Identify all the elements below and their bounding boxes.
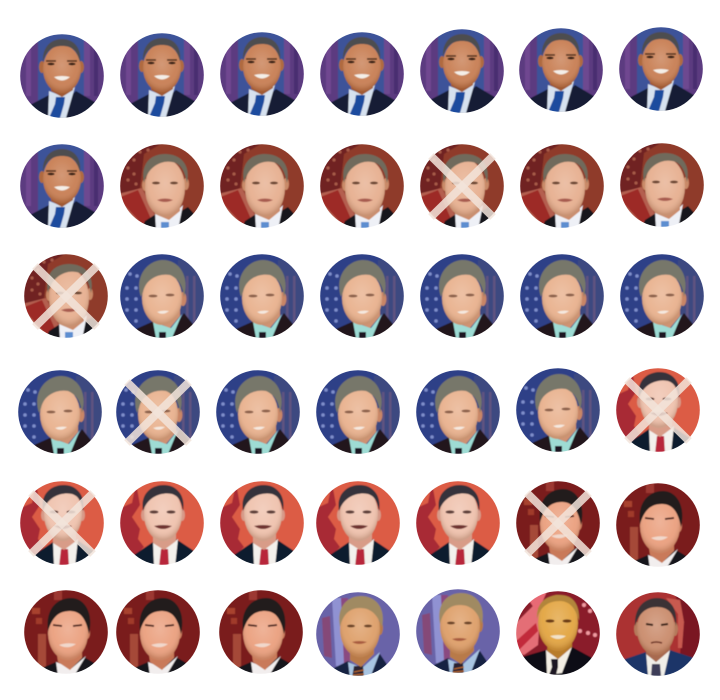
portrait: Clinton 6 [618, 252, 706, 341]
portrait: Clinton 2 [218, 252, 306, 341]
portrait: Clinton 7 [16, 368, 104, 457]
portrait: Bush crossed out [418, 142, 506, 231]
portrait: Reagan 4 [114, 588, 202, 677]
portrait: Bush 2 [218, 142, 306, 231]
portrait: Clinton 9 [214, 368, 302, 457]
portrait: Reagan 2 [614, 481, 702, 570]
portrait: H. W. Bush crossed out [18, 479, 106, 568]
portrait: H. W. Bush 5 [314, 479, 402, 568]
row 6: Reagan, Carter, Ford, Nixon [22, 587, 702, 679]
row 2: Obama and G. W. Bush [18, 141, 706, 231]
portrait: Obama 2 [118, 31, 206, 120]
portrait: Obama 5 [418, 27, 506, 116]
portrait: Clinton 3 [318, 252, 406, 341]
portrait: Obama 7 [617, 25, 705, 114]
portrait: Reagan crossed out [514, 479, 602, 568]
portrait: H. W. Bush 4 [218, 479, 306, 568]
portrait: Bush crossed out [22, 252, 110, 341]
row 4: Clinton and H. W. Bush [16, 366, 702, 457]
portrait: Ford [514, 589, 602, 678]
portrait: Bush 5 [518, 142, 606, 231]
portrait: Clinton crossed out [114, 368, 202, 457]
portrait: Clinton 11 [414, 368, 502, 457]
portrait: Clinton 10 [314, 368, 402, 457]
portrait: H. W. Bush 6 [414, 479, 502, 568]
row 1: Obama [18, 25, 705, 121]
portrait: Obama 6 [517, 26, 605, 115]
portrait: Bush 1 [118, 142, 206, 231]
row 3: Bush and Clinton [22, 252, 706, 341]
portrait: Obama 8 [18, 142, 106, 231]
portrait: Obama 1 [18, 32, 106, 121]
portrait: Obama 3 [218, 30, 306, 119]
row 5: H. W. Bush and Reagan [18, 479, 702, 570]
portrait: Reagan 3 [22, 588, 110, 677]
portrait: Clinton 12 [514, 366, 602, 455]
portrait: Reagan 5 [217, 588, 305, 677]
portrait: H. W. Bush 3 [118, 479, 206, 568]
portrait: Clinton 4 [418, 252, 506, 341]
portrait: Clinton 1 [118, 252, 206, 341]
portrait: Carter 2 [414, 587, 502, 676]
portrait: Obama 4 [318, 30, 406, 119]
portrait: Bush 3 [318, 142, 406, 231]
portrait: Clinton 5 [518, 252, 606, 341]
portrait: Carter 1 [314, 590, 402, 679]
portrait: Nixon [614, 590, 702, 679]
portrait: Bush 6 [618, 141, 706, 230]
portrait: H. W. Bush crossed out [614, 366, 702, 455]
